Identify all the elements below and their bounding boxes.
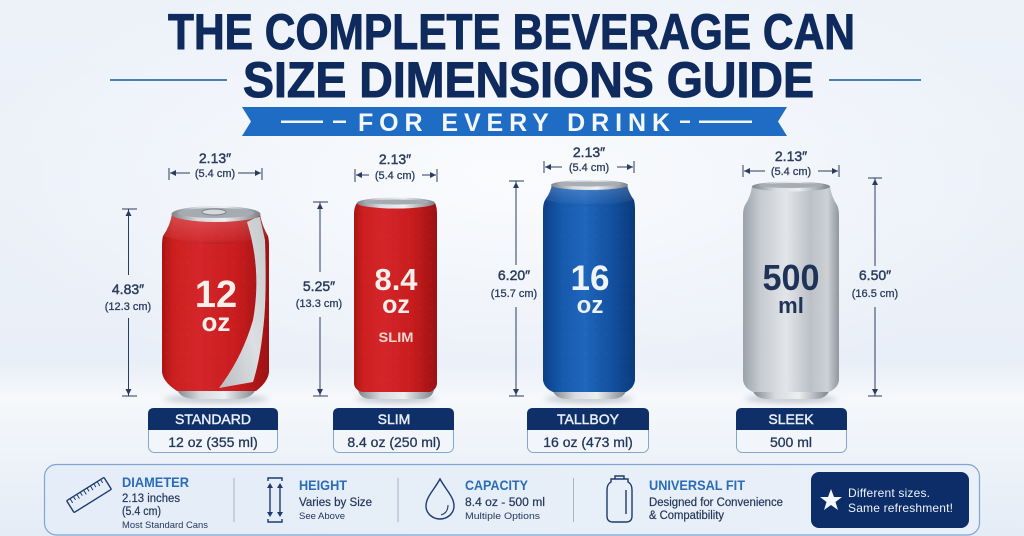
can group: sleek — [736, 148, 898, 452]
height dimension: standard: (12.3 cm) — [105, 301, 151, 313]
can group: tallboy — [491, 144, 649, 452]
width dimension: standard: (5.4 cm) — [195, 168, 235, 180]
can: tallboy 16 oz — [543, 180, 635, 403]
spec: diameter: (5.4 cm) — [122, 506, 161, 518]
width dimension: sleek — [743, 148, 839, 178]
spec: universal fit — [607, 476, 783, 522]
label: tallboy — [527, 408, 649, 452]
height dimension: standard — [105, 209, 151, 396]
height dimension: tallboy: (15.7 cm) — [491, 288, 537, 300]
banner: for every drink: FOR EVERY DRINK — [358, 109, 670, 137]
can: slim 8.4 oz — [354, 198, 437, 403]
label: standard: STANDARD — [175, 411, 251, 427]
width dimension: standard: 2.13″ — [199, 150, 231, 166]
banner: for every drink — [242, 107, 787, 137]
can: standard 12 oz — [162, 206, 269, 403]
callout: different sizes: Different sizes. — [848, 486, 930, 500]
spec: diameter: DIAMETER — [122, 474, 189, 490]
can label: 500 ml: ml — [778, 293, 804, 318]
width dimension: sleek: 2.13″ — [775, 148, 807, 164]
can label: 16 oz — [571, 259, 609, 319]
label: tallboy: TALLBOY — [557, 411, 620, 427]
spec: capacity: 8.4 oz - 500 ml — [465, 497, 545, 509]
icon: ruler — [67, 477, 111, 513]
can label: 16 oz: 16 — [571, 259, 609, 298]
height dimension: slim — [296, 202, 342, 396]
can label: 500 ml: 500 — [762, 257, 820, 298]
label: slim — [333, 408, 454, 452]
can label: 8.4 oz slim: 8.4 — [374, 262, 418, 297]
label: standard: 12 oz (355 ml) — [168, 434, 258, 450]
width dimension: slim — [355, 151, 437, 182]
label: slim: 8.4 oz (250 ml) — [347, 434, 441, 450]
icon: can outline — [607, 476, 632, 522]
can label: 500 ml — [762, 257, 820, 318]
label: sleek: 500 ml — [770, 434, 812, 450]
width dimension: slim: 2.13″ — [379, 151, 411, 167]
height dimension: sleek: (16.5 cm) — [852, 288, 898, 300]
width dimension: tallboy: 2.13″ — [573, 144, 605, 160]
spec: capacity: Multiple Options — [465, 511, 540, 522]
spec: universal fit: & Compatibility — [649, 510, 724, 522]
spec: height: HEIGHT — [299, 477, 347, 493]
spec: diameter: 2.13 inches — [122, 493, 180, 505]
can: sleek 500 ml — [743, 182, 839, 403]
can group: slim — [296, 151, 454, 452]
callout: different sizes: Same refreshment! — [848, 501, 953, 515]
height dimension: sleek: 6.50″ — [859, 267, 891, 283]
label: slim: SLIM — [378, 411, 410, 427]
height dimension: tallboy: 6.20″ — [498, 267, 530, 283]
spec: diameter: Most Standard Cans — [122, 520, 208, 531]
label: sleek — [736, 408, 847, 452]
spec: capacity: CAPACITY — [465, 477, 529, 493]
spec: universal fit: UNIVERSAL FIT — [649, 477, 745, 493]
can label: 8.4 oz slim: oz — [382, 291, 410, 319]
can label: 12 oz — [195, 274, 237, 337]
icon: star — [820, 489, 842, 510]
width dimension: tallboy — [544, 144, 634, 174]
label: sleek: SLEEK — [768, 411, 814, 427]
label: standard — [148, 408, 278, 452]
width dimension: slim: (5.4 cm) — [375, 170, 415, 182]
height dimension: sleek — [852, 178, 898, 396]
can label: 8.4 oz slim — [374, 262, 418, 345]
spec: height: See Above — [299, 511, 345, 522]
can label: 16 oz: oz — [577, 292, 603, 319]
title — [168, 4, 855, 108]
label: tallboy: 16 oz (473 ml) — [543, 434, 633, 450]
height dimension: slim: 5.25″ — [303, 278, 335, 294]
height dimension: slim: (13.3 cm) — [296, 298, 342, 310]
height dimension: tallboy — [491, 181, 537, 396]
icon: height arrows — [267, 478, 283, 522]
spec: capacity — [426, 477, 545, 522]
can label: 8.4 oz slim: SLIM — [378, 329, 414, 345]
can label: 12 oz: 12 — [195, 274, 237, 316]
width dimension: standard — [169, 150, 262, 180]
width dimension: tallboy: (5.4 cm) — [569, 162, 609, 174]
title: THE COMPLETE BEVERAGE CAN — [168, 4, 855, 60]
spec: universal fit: Designed for Convenience — [649, 497, 783, 509]
callout: different sizes — [811, 472, 969, 528]
icon: water drop — [426, 479, 454, 519]
can label: 12 oz: oz — [202, 307, 230, 337]
spec: height: Varies by Size — [299, 497, 372, 509]
can group: standard — [105, 150, 278, 452]
height dimension: standard: 4.83″ — [112, 281, 144, 297]
panel: specifications — [44, 464, 980, 535]
width dimension: sleek: (5.4 cm) — [771, 166, 811, 178]
spec: diameter — [67, 474, 208, 531]
title: SIZE DIMENSIONS GUIDE — [243, 52, 814, 108]
spec: height — [267, 477, 372, 522]
